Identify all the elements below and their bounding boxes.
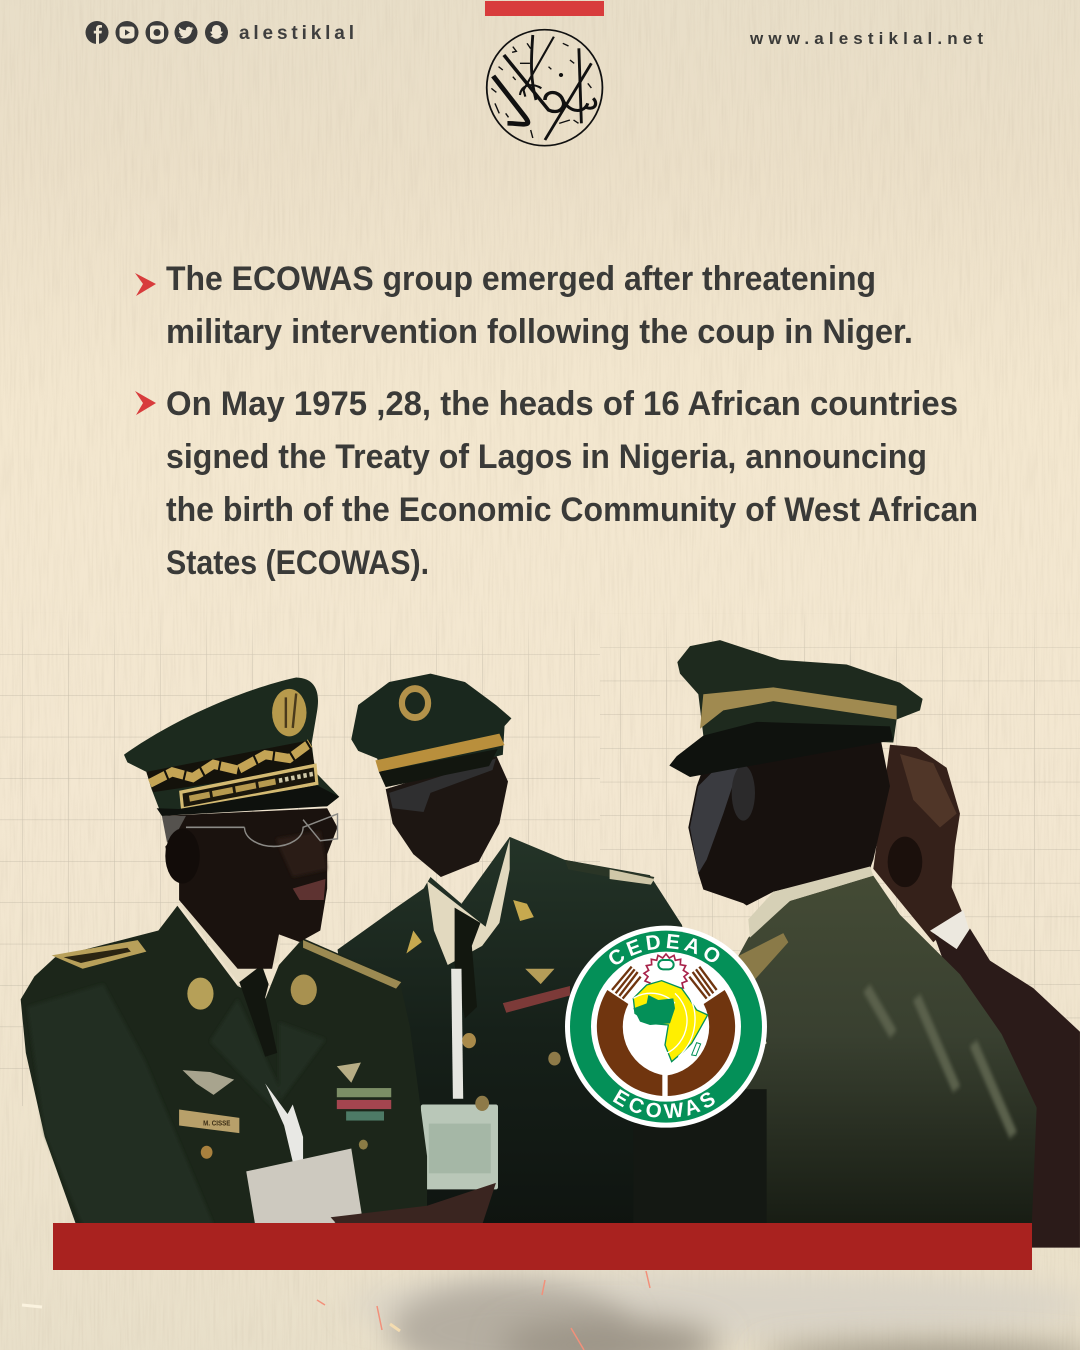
name tag [179,1109,239,1133]
cap [677,640,923,743]
shoulder boards [52,940,146,969]
icon: facebook [86,21,108,44]
head [688,736,890,906]
text block: first bullet: military intervention following the coup in Niger. [166,313,913,351]
sparks [22,1271,650,1350]
map of Africa [633,981,708,1062]
sun emblem [644,954,688,997]
buttons [201,1146,212,1159]
icon: instagram [146,21,168,44]
graph paper grid [0,610,1080,1106]
ECOWAS emblem [565,926,767,1128]
text block: first bullet: The ECOWAS group emerged after threatening [166,260,876,298]
icon: calligraphic roundel logo [487,30,602,146]
text block: second bullet: States (ECOWAS). [166,544,429,582]
photo: man in dark suit, far right [873,745,1080,1248]
shirt collar [748,866,873,938]
photo: officer seen from behind, right [633,640,1037,1229]
jacket highlights [867,988,1013,1135]
face [162,808,338,969]
brand handle: alestiklal [239,23,354,44]
bullet arrow 2 [135,391,156,415]
ECOWAS label: ECOWAS [612,1089,715,1118]
CEDEAO label: CEDEAO [609,934,720,964]
photo: general with gold cap, foreground left: M. CISSE [203,1120,231,1128]
icon: snapchat [205,21,228,44]
uniform jacket [21,906,427,1229]
text block: second bullet: the birth of the Economic Community of West African [166,491,978,529]
lower dark body under logo [633,1089,767,1229]
jacket [648,876,1037,1229]
icon: twitter [174,21,198,44]
tie [239,965,277,1057]
text block: first bullet [166,260,913,351]
photo: general with gold cap, foreground left [21,677,496,1229]
website url: www.alestiklal.net [749,29,983,48]
epaulette [738,933,788,981]
bullet arrow 1 [135,273,156,296]
photo: officer with cap, centre back [338,674,703,1229]
green ring [570,931,762,1123]
id badge [246,1148,362,1223]
text block: second bullet: On May 1975 ,28, the heads of 16 African countries [166,385,958,423]
lanyard [265,1083,303,1162]
brown ring [597,990,735,1096]
social icons [86,21,228,44]
icon: youtube [116,21,138,44]
text block: second bullet: signed the Treaty of Lagos in Nigeria, announcing [166,438,927,476]
peaked cap [124,677,339,816]
curved text paths [588,948,744,1027]
medal ribbons [337,1062,391,1121]
parachute wings [183,1070,234,1095]
shirt collar [179,904,281,986]
red caption bar [53,1223,1032,1270]
outer white disc [565,926,767,1128]
collar insignia [187,978,214,1010]
jacket folds and lapels [28,984,325,1225]
smoke at the bottom [350,1273,1080,1350]
handshake hand [331,1183,496,1225]
top red tab [485,1,604,16]
brown stripes [612,967,717,999]
text block: second bullet [166,385,978,582]
